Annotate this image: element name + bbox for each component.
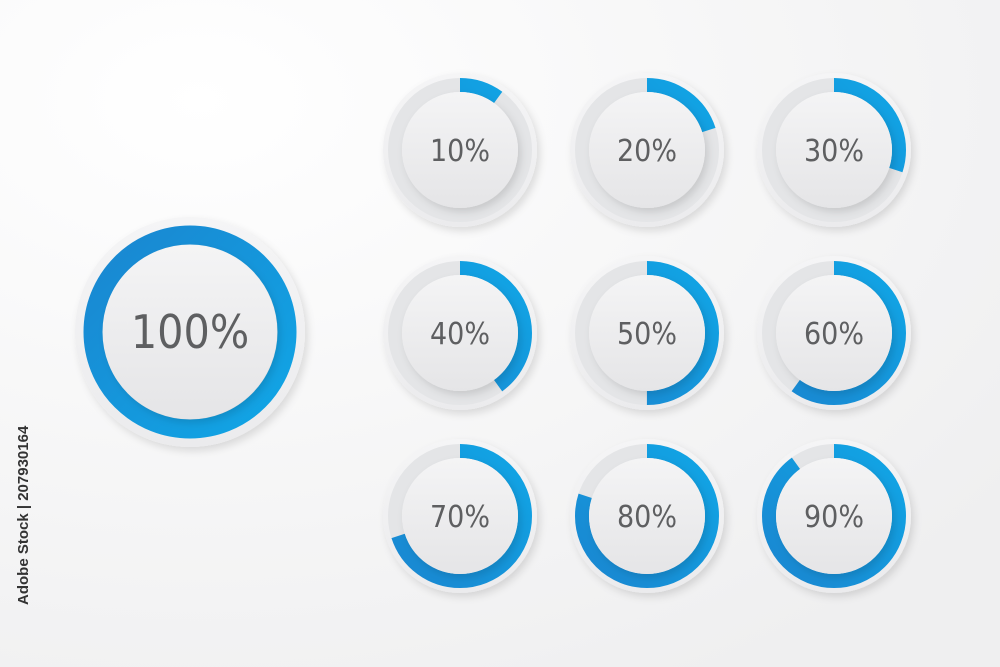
gauge 20%: 20% [617, 134, 677, 169]
gauge 30%: 30% [804, 134, 864, 169]
gauge 50% [570, 256, 724, 410]
gauge 40%: 40% [430, 317, 490, 352]
gauge 60% [757, 256, 911, 410]
gauge 50%: 50% [617, 317, 677, 352]
big gauge 100% [75, 217, 305, 447]
gauge 10% [383, 73, 537, 227]
gauge 80% [570, 439, 724, 593]
gauge 70% [383, 439, 537, 593]
gauge 90% [757, 439, 911, 593]
gauge 70%: 70% [430, 500, 490, 535]
gauge 40% [383, 256, 537, 410]
gauge 90%: 90% [804, 500, 864, 535]
gauge 20% [570, 73, 724, 227]
gauge 80%: 80% [617, 500, 677, 535]
label 100%: 100% [131, 305, 249, 359]
gauge 60%: 60% [804, 317, 864, 352]
watermark id text: Adobe Stock | 207930164 [15, 425, 32, 605]
gauge 10%: 10% [430, 134, 490, 169]
gauge 30% [757, 73, 911, 227]
